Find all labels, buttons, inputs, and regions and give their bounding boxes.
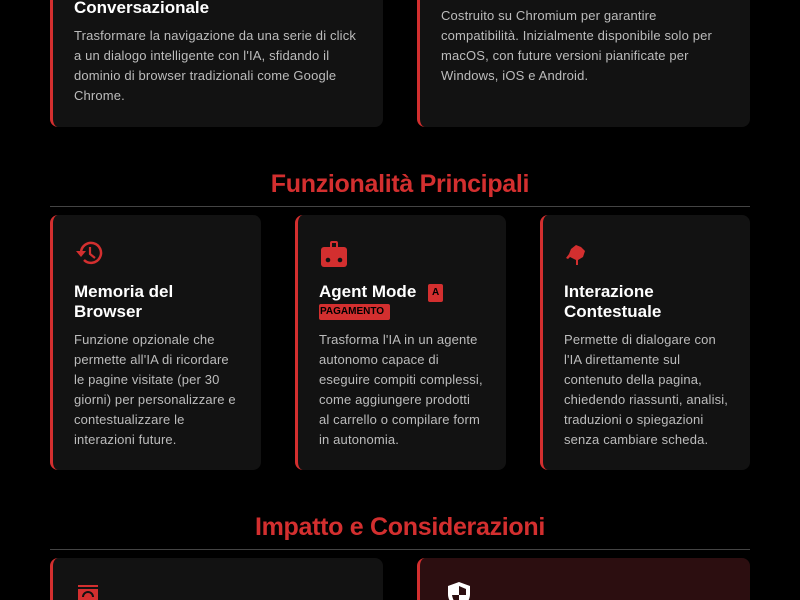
badge pagamento: PAGAMENTO	[320, 306, 384, 317]
text: Permette di dialogare con	[564, 332, 716, 347]
text	[74, 332, 236, 447]
card text: compatibilità. Inizialmente disponibile solo per	[441, 28, 712, 43]
text: eseguire compiti complessi,	[319, 372, 483, 387]
card: impatto left	[50, 558, 383, 600]
text	[319, 332, 483, 447]
title: Memoria del	[74, 282, 173, 301]
card: agent mode	[295, 215, 506, 470]
card text: dominio di browser tradizionali come Google	[74, 68, 336, 83]
text: contestualizzare le	[74, 412, 185, 427]
icon: shield	[448, 582, 470, 600]
card: interazione contestuale	[540, 215, 750, 470]
heading: impatto e considerazioni: Impatto e Considerazioni	[255, 513, 545, 541]
text: autonomo capace di	[319, 352, 439, 367]
card text: macOS, con future versioni pianificate per	[441, 48, 689, 63]
text: giorni) per personalizzare e	[74, 392, 236, 407]
icon: history	[76, 242, 102, 264]
title	[564, 282, 661, 321]
text: Trasforma l'IA in un agente	[319, 332, 478, 347]
card: conversazionale	[50, 0, 383, 127]
badge pagamento	[319, 304, 390, 320]
card text	[441, 8, 712, 83]
icon: hand	[566, 245, 585, 265]
badge A	[428, 284, 443, 302]
text	[564, 332, 728, 447]
card: impatto right	[417, 558, 750, 600]
icon: robot	[321, 241, 347, 267]
text: le pagine visitate (per 30	[74, 372, 220, 387]
title: Interazione	[564, 282, 654, 301]
badge A: A	[432, 287, 439, 298]
title: Contestuale	[564, 302, 661, 321]
text: Funzione opzionale che	[74, 332, 215, 347]
title: Agent Mode	[319, 282, 416, 301]
text: contenuto della pagina,	[564, 372, 702, 387]
text: come aggiungere prodotti	[319, 392, 470, 407]
text: chiedendo riassunti, analisi,	[564, 392, 728, 407]
title: Browser	[74, 302, 142, 321]
text: l'IA direttamente sul	[564, 352, 680, 367]
text: traduzioni o spiegazioni	[564, 412, 703, 427]
card text	[74, 28, 356, 103]
card text: Chrome.	[74, 88, 125, 103]
text: interazioni future.	[74, 432, 177, 447]
text: al carrello o compilare form	[319, 412, 480, 427]
icon: box	[78, 585, 98, 600]
card text: Costruito su Chromium per garantire	[441, 8, 656, 23]
title	[74, 282, 173, 321]
card text: Windows, iOS e Android.	[441, 68, 588, 83]
heading: funzionalità principali: Funzionalità Principali	[271, 170, 529, 198]
card: chromium	[417, 0, 750, 127]
text: in autonomia.	[319, 432, 399, 447]
card: memoria	[50, 215, 261, 470]
text: permette all'IA di ricordare	[74, 352, 229, 367]
card text: Trasformare la navigazione da una serie di click	[74, 28, 356, 43]
card text: a un dialogo intelligente con l'IA, sfidando il	[74, 48, 329, 63]
text: senza cambiare scheda.	[564, 432, 708, 447]
